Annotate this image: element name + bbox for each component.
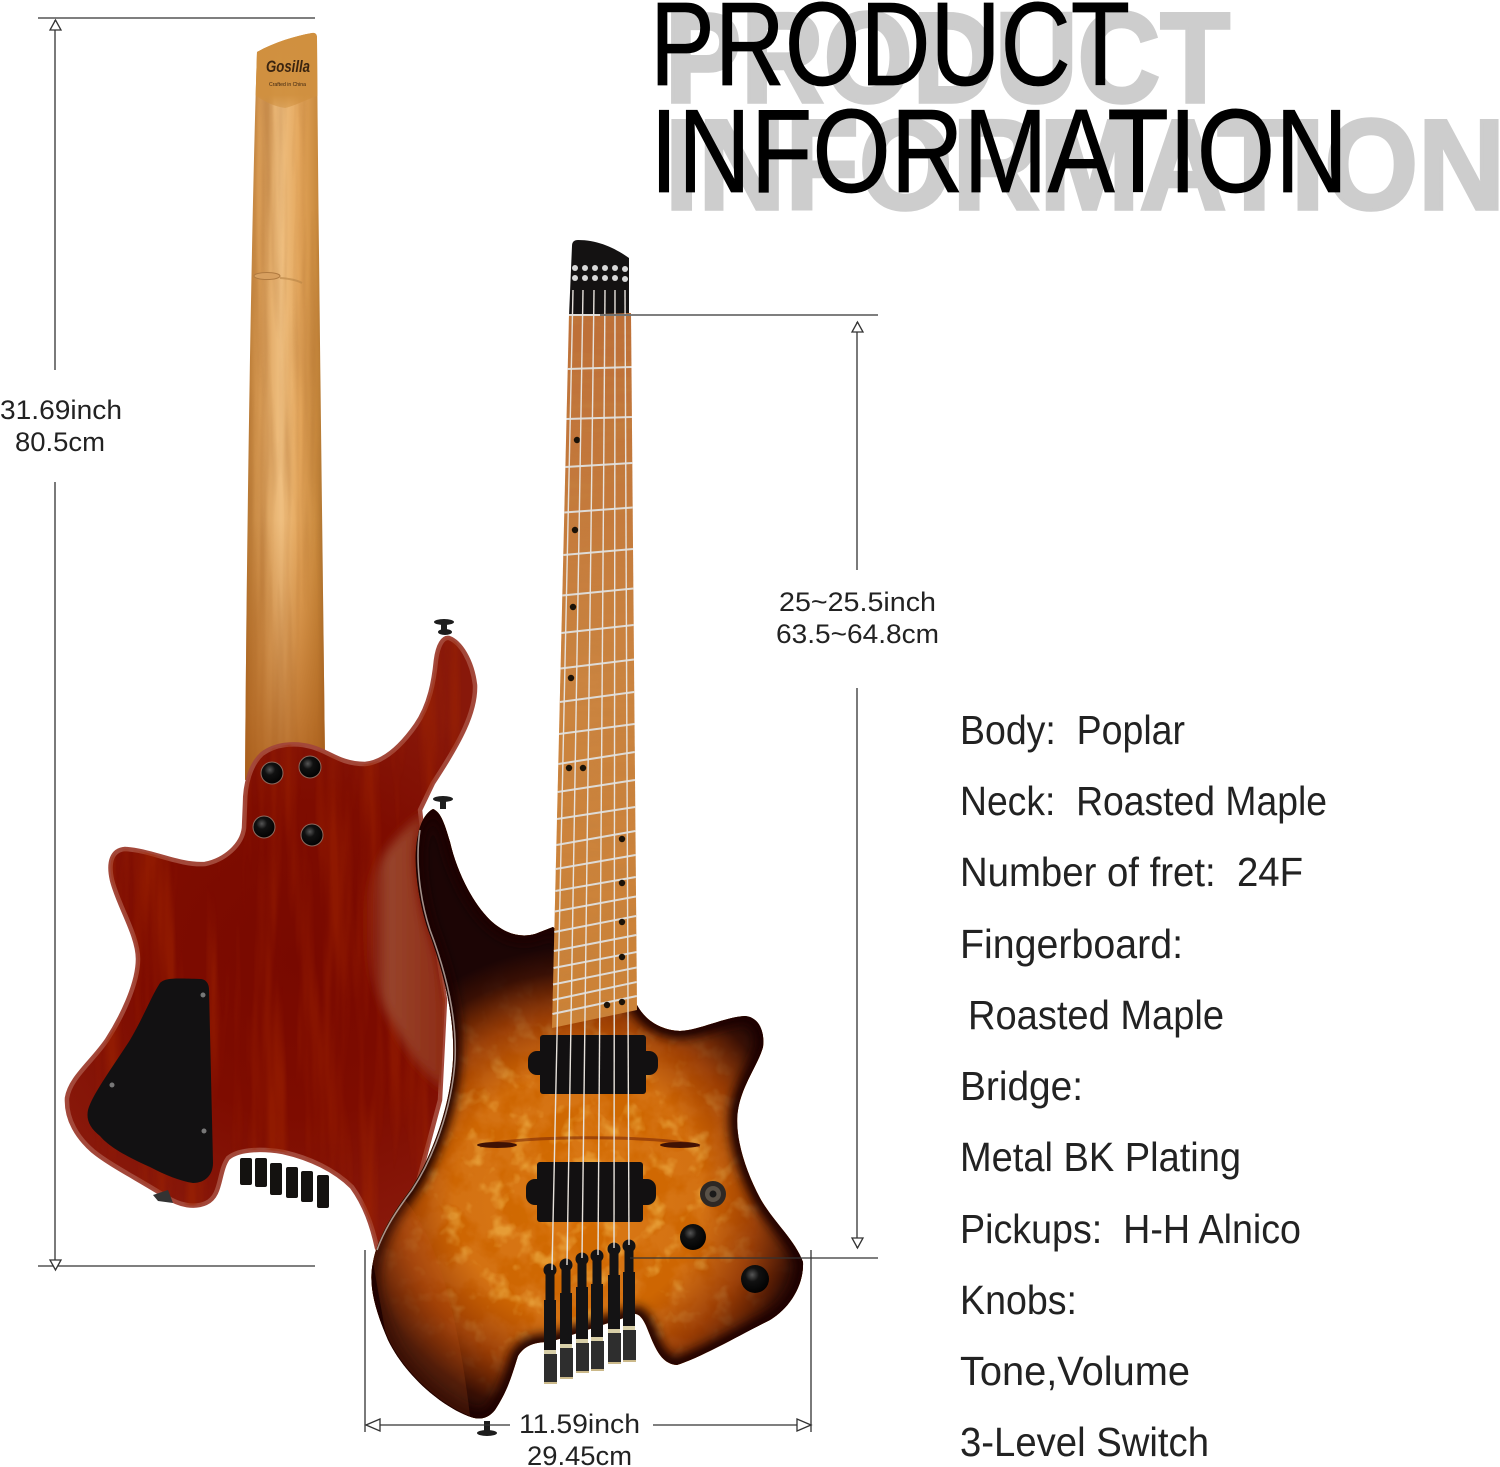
label: 31.69inch 80.5cm: 80.5cm [15, 427, 105, 457]
label: 25~25.5inch 63.5~64.8cm: 25~25.5inch [779, 587, 936, 617]
label: 31.69inch 80.5cm: 31.69inch [0, 395, 122, 425]
volume knob [741, 1265, 769, 1293]
foreground title: black PRODUCT INFORMATION: INFORMATION [650, 85, 1348, 218]
back strap pin [434, 619, 454, 635]
body gloss edge [377, 830, 455, 1250]
neck pickup [528, 1035, 658, 1094]
foreground title: black PRODUCT INFORMATION [650, 0, 1348, 218]
back neck bolts [253, 756, 323, 846]
specification list: Number of fret: 24F [960, 849, 1303, 895]
back tuner knobs [240, 1158, 329, 1208]
specification list: Roasted Maple [968, 992, 1224, 1038]
specification list: Metal BK Plating [960, 1134, 1241, 1180]
label: 11.59inch 29.45cm [519, 1409, 640, 1467]
back body shaded crescent [364, 812, 449, 1090]
specification list: 3-Level Switch [960, 1419, 1209, 1465]
headstock logo: Gosilla: Gosilla [266, 57, 310, 76]
label: 25~25.5inch 63.5~64.8cm: 63.5~64.8cm [776, 619, 939, 649]
front view guitar [360, 240, 820, 1436]
specification list: Bridge: [960, 1063, 1083, 1109]
back pickguard plate [88, 978, 213, 1183]
specification list: Knobs: [960, 1277, 1077, 1323]
background title: grey PRODUCT INFORMATION [665, 0, 1500, 237]
tone knob [680, 1224, 706, 1250]
specification list: Tone,Volume [960, 1348, 1190, 1394]
headstock logo: Gosilla [266, 57, 310, 88]
front strap pins [433, 796, 497, 1436]
back body [60, 630, 480, 1270]
label: 25~25.5inch 63.5~64.8cm [776, 587, 939, 649]
small jack on back body [153, 1190, 173, 1203]
headstock logo: Gosilla: Crafted in China [269, 82, 306, 88]
headstock [569, 240, 629, 316]
fret markers [566, 437, 625, 1008]
label: 31.69inch 80.5cm [0, 395, 122, 457]
specification list [960, 707, 1327, 1465]
back neck [245, 32, 325, 780]
specification list: Fingerboard: [960, 921, 1183, 967]
fingerboard [552, 313, 637, 1028]
front body sunburst [360, 800, 820, 1430]
toggle switch [700, 1181, 726, 1207]
specification list: Neck: Roasted Maple [960, 778, 1327, 824]
bridge saddles and tuners [544, 1240, 636, 1384]
frets [552, 315, 637, 1014]
specification list: Pickups: H-H Alnico [960, 1206, 1301, 1252]
label: 11.59inch 29.45cm: 11.59inch [519, 1409, 640, 1439]
dimension: body width [365, 1250, 811, 1467]
dimension: scale length [600, 315, 939, 1258]
specification list: Body: Poplar [960, 707, 1185, 753]
bridge pickup [526, 1162, 656, 1222]
back view guitar [60, 30, 480, 1270]
strings [552, 290, 629, 1270]
dimension: overall height [0, 18, 315, 1270]
